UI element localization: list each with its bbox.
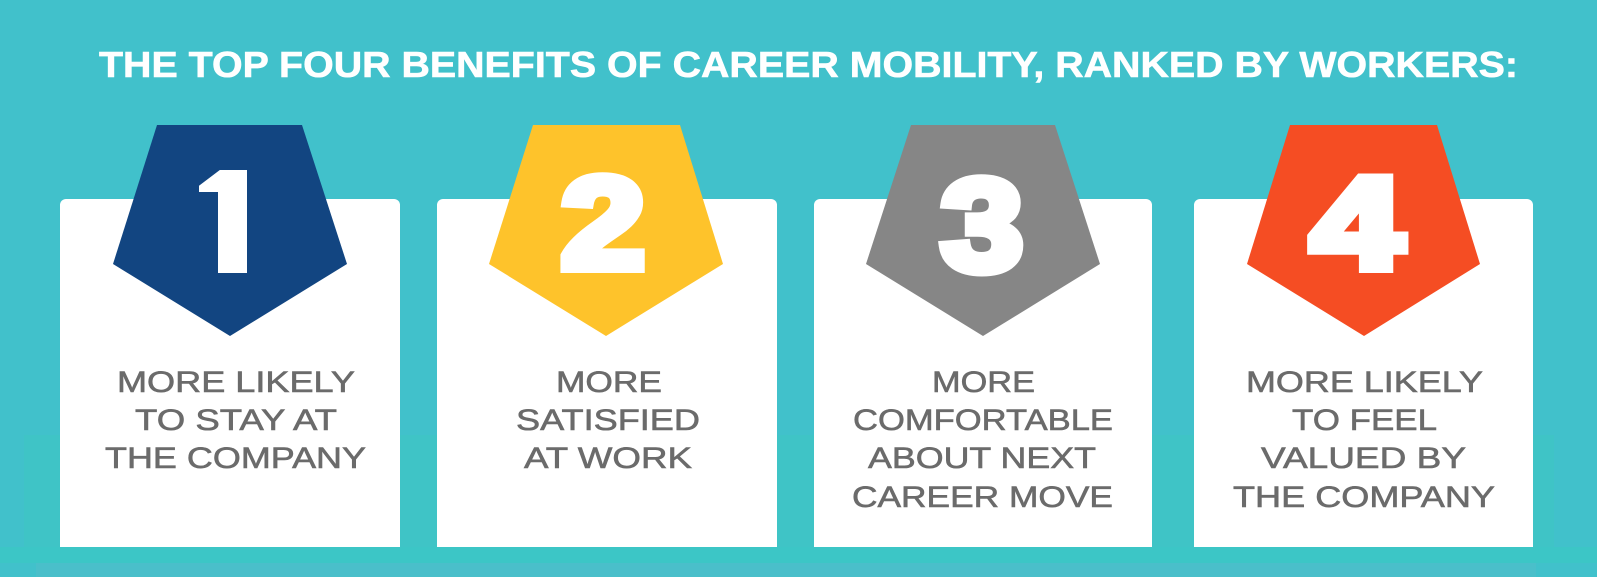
benefit 1 text: MORE LIKELY (117, 366, 355, 399)
panel: benefit 4 (1194, 125, 1533, 547)
benefit 1 text: THE COMPANY (105, 442, 366, 475)
benefit 3 text: ABOUT NEXT (868, 442, 1096, 475)
benefit 1 text: TO STAY AT (135, 404, 337, 437)
card 2 background (437, 199, 777, 547)
number 4: 4 (1311, 150, 1403, 296)
benefit 2 text: SATISFIED (516, 404, 700, 437)
number 1: 1 (199, 150, 261, 296)
number 3: 3 (941, 152, 1023, 298)
benefit 2 text (516, 366, 700, 475)
card 4 background (1194, 199, 1533, 547)
badge 1 (113, 125, 347, 336)
benefit 4 text: THE COMPANY (1233, 481, 1495, 514)
benefit 4 text (1233, 366, 1495, 514)
card 1 background (60, 199, 400, 547)
benefit 3 text: MORE (932, 366, 1035, 399)
card 3 background (814, 199, 1152, 547)
number 2: 2 (561, 150, 645, 296)
panel: benefit 3 (814, 125, 1152, 547)
panel: benefit 1 (60, 125, 400, 547)
benefit 3 text: CAREER MOVE (852, 481, 1113, 514)
benefit 4 text: TO FEEL (1292, 404, 1437, 437)
benefit 2 text: MORE (556, 366, 662, 399)
benefit 1 text (105, 366, 366, 475)
benefit 4 text: MORE LIKELY (1246, 366, 1483, 399)
benefit 3 text: COMFORTABLE (853, 404, 1113, 437)
badge 2 (489, 125, 723, 336)
benefit 2 text: AT WORK (524, 442, 692, 475)
benefit 3 text (852, 366, 1113, 514)
panel: benefit 2 (437, 125, 777, 547)
title: THE TOP FOUR BENEFITS OF CAREER MOBILITY, RANKED BY WORKERS: (99, 44, 1518, 85)
badge 3 (866, 125, 1100, 336)
benefit 4 text: VALUED BY (1261, 442, 1466, 475)
badge 4 (1247, 125, 1480, 336)
